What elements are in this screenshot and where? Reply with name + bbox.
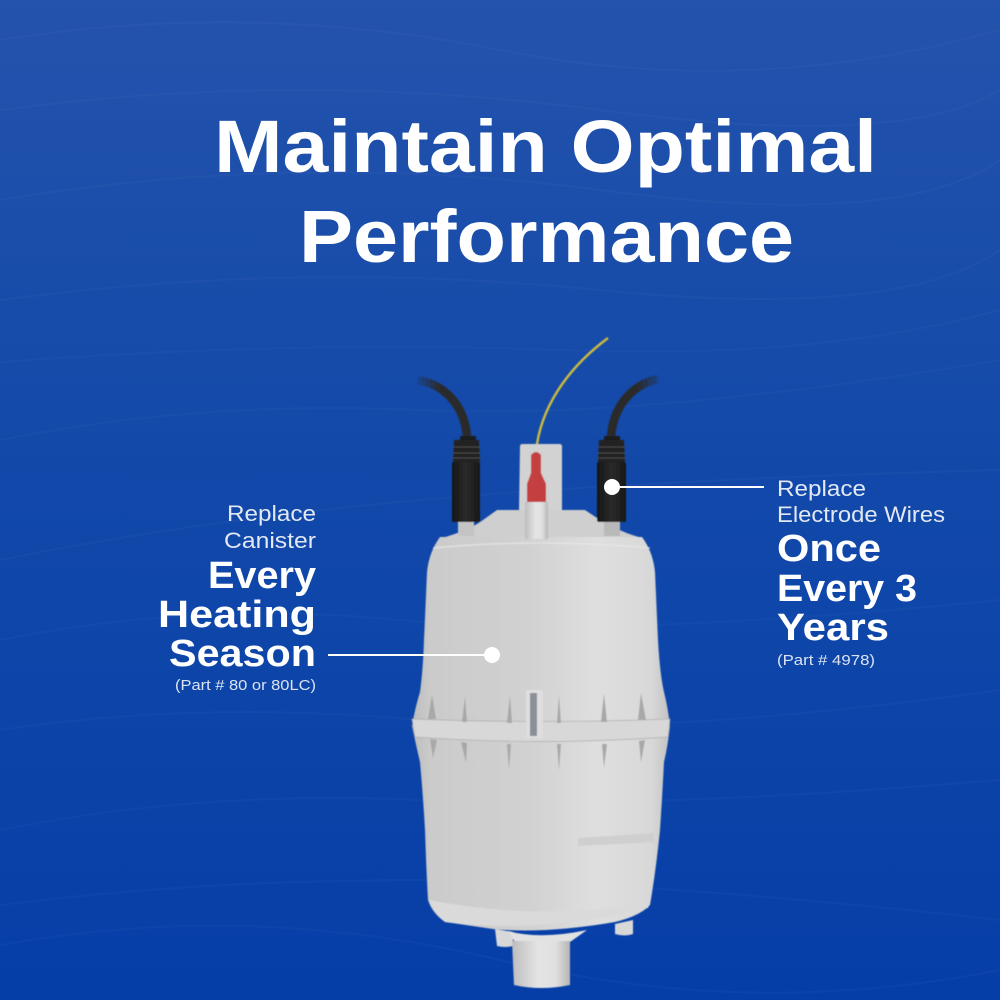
pointer: electrode wires xyxy=(604,479,764,495)
pointer: canister xyxy=(328,647,500,663)
callout: replace electrode wires: Every 3 xyxy=(777,568,917,610)
canister product illustration xyxy=(412,338,670,988)
right black cable xyxy=(611,379,658,436)
left plug xyxy=(452,436,481,536)
lower seam xyxy=(578,833,654,846)
callout: replace canister: Heating xyxy=(158,594,316,636)
callout: replace electrode wires: Years xyxy=(777,607,889,649)
centre terminal xyxy=(525,502,548,539)
bottom rim xyxy=(429,900,650,926)
shoulder line xyxy=(433,543,650,548)
centre clip xyxy=(526,690,543,738)
callout: replace electrode wires xyxy=(777,476,945,669)
callout: replace electrode wires: Electrode Wires xyxy=(777,502,945,527)
middle band xyxy=(412,719,670,742)
callout: replace canister: Canister xyxy=(224,528,316,553)
red connector xyxy=(527,452,546,502)
callout: replace electrode wires: Replace xyxy=(777,476,866,501)
title: Maintain Optimal xyxy=(214,105,877,188)
callout: replace canister: Replace xyxy=(227,501,316,526)
top port xyxy=(519,444,562,512)
right plug xyxy=(597,436,626,536)
callout: replace electrode wires: Once xyxy=(777,528,881,570)
nozzle and feet xyxy=(495,920,633,988)
callout: replace canister: Season xyxy=(169,633,316,675)
band ribs xyxy=(428,693,646,770)
callout: replace canister: (Part # 80 or 80LC) xyxy=(175,677,316,694)
title: Performance xyxy=(299,195,794,278)
yellow wire xyxy=(536,338,608,452)
callout: replace canister xyxy=(158,501,316,694)
callout: replace electrode wires: (Part # 4978) xyxy=(777,652,875,669)
canister top collar xyxy=(442,510,642,538)
title xyxy=(214,105,877,278)
left black cable xyxy=(418,380,467,436)
canister body xyxy=(412,537,670,930)
callout: replace canister: Every xyxy=(208,555,316,597)
